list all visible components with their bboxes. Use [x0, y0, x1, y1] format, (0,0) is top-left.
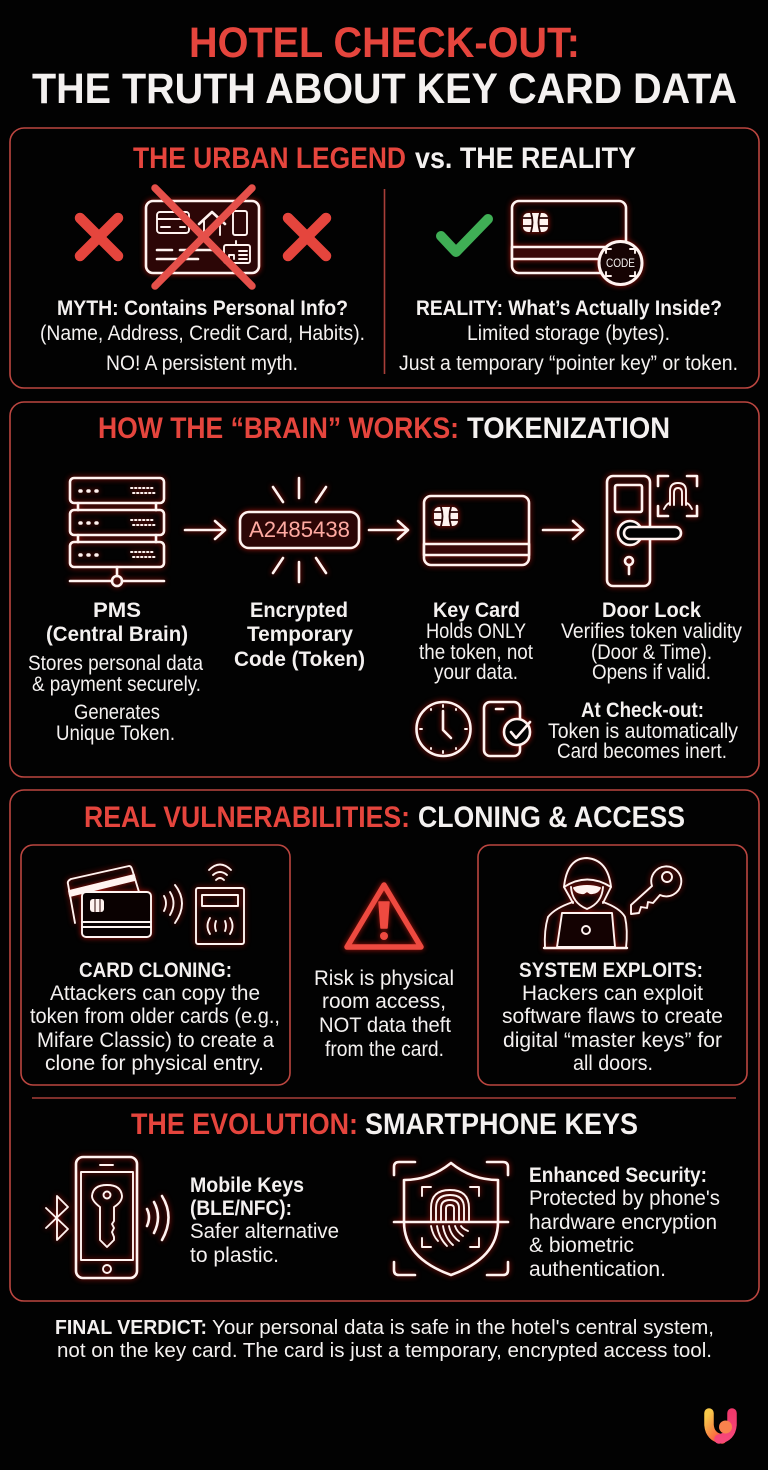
text: mobile keys: [190, 1173, 339, 1267]
text: mobile keys: to plastic.: [190, 1243, 279, 1267]
text: enhanced security: Enhanced Security:: [529, 1163, 707, 1187]
text: key card: [419, 598, 533, 684]
icon: right red cross: [288, 218, 326, 256]
heading: how the brain works: TOKENIZATION: [467, 412, 670, 445]
icon: clock: [416, 702, 470, 756]
text: PMS: Stores personal data: [28, 651, 203, 675]
text: card cloning: clone for physical entry.: [45, 1051, 264, 1075]
text: card cloning: token from older cards (e.g.,: [30, 1004, 280, 1028]
icon: card with code badge: CODE: [606, 256, 635, 270]
text: myth: NO! A persistent myth.: [106, 351, 298, 375]
icon: fingerprint shield: [394, 1162, 508, 1275]
text: mobile keys: Safer alternative: [190, 1219, 339, 1243]
icon: token code: [240, 478, 359, 582]
text: reality: Limited storage (bytes).: [467, 321, 670, 345]
icon: card with personal data: [146, 201, 259, 273]
text: mobile keys: (BLE/NFC):: [190, 1196, 292, 1220]
panel: system exploits: [32, 845, 747, 1281]
text: PMS: & payment securely.: [32, 672, 201, 696]
icon: key card: [424, 496, 529, 565]
heading: real vulnerabilities: [84, 801, 685, 834]
icon: server: [70, 478, 164, 586]
text: myth: [40, 296, 365, 375]
text: card cloning: [30, 958, 280, 1075]
heading: urban legend vs reality: THE URBAN LEGEND: [133, 142, 406, 175]
icon: token code: A2485438: [249, 517, 350, 542]
heading: the evolution: [131, 1108, 638, 1141]
heading: how the brain works: HOW THE “BRAIN” WORKS:: [98, 412, 459, 445]
text: risk statement: from the card.: [325, 1037, 444, 1061]
icon: left red cross: [80, 218, 118, 256]
icon: bluetooth: [46, 1196, 68, 1240]
icon: door lock: [607, 476, 697, 586]
icon: signal waves and reader: [164, 864, 244, 944]
arrow: server to token: [185, 521, 225, 539]
panel: urban legend vs reality: [10, 128, 759, 388]
arrow: card to door: [543, 521, 583, 539]
panel: real vulnerabilities: [10, 790, 759, 1439]
text: card cloning: Mifare Classic) to create a: [37, 1028, 274, 1052]
text: reality: REALITY: What’s Actually Inside?: [416, 296, 722, 320]
text: key card: Holds ONLY: [426, 619, 526, 643]
icon: smartphone key: [76, 1157, 137, 1278]
text: mobile keys: Mobile Keys: [190, 1173, 304, 1197]
text: reality: Just a temporary “pointer key” or token.: [399, 351, 738, 375]
text: PMS: Generates: [74, 700, 160, 724]
text: enhanced security: hardware encryption: [529, 1210, 717, 1234]
text: encrypted temporary code: Encrypted: [250, 598, 348, 622]
text: final verdict: not on the key card. The card is just a temporary, encrypted access tool.: [57, 1340, 712, 1362]
text: system exploits: digital “master keys” for: [503, 1028, 722, 1052]
icon: card with code badge: [512, 201, 642, 284]
text: PMS: PMS: [93, 598, 141, 622]
text: at check-out: Token is automatically: [548, 719, 738, 743]
text: encrypted temporary code: [234, 598, 365, 671]
heading: the evolution: THE EVOLUTION:: [131, 1108, 358, 1141]
text: system exploits: software flaws to create: [502, 1004, 723, 1028]
icon: cloned cards: [68, 866, 151, 937]
text: PMS: (Central Brain): [46, 622, 188, 646]
text: encrypted temporary code: Code (Token): [234, 647, 365, 671]
text: at check-out: Card becomes inert.: [557, 739, 727, 763]
text: card cloning: Attackers can copy the: [50, 981, 260, 1005]
text: PMS: [28, 598, 203, 745]
icon: big red cross over card: [155, 188, 252, 286]
text: risk statement: NOT data theft: [319, 1013, 451, 1037]
text: at check-out: [548, 698, 738, 763]
text: risk statement: [314, 966, 454, 1061]
text: risk statement: Risk is physical: [314, 966, 454, 990]
text: door lock: Door Lock: [602, 598, 701, 622]
text: system exploits: Hackers can exploit: [522, 981, 703, 1005]
text: risk statement: room access,: [322, 989, 446, 1013]
text: enhanced security: Protected by phone's: [529, 1186, 720, 1210]
icon: master key: [631, 866, 681, 914]
icon: green check: [441, 219, 488, 252]
text: key card: Key Card: [433, 598, 520, 622]
text: final verdict: Your personal data is safe in the hotel's central system,: [212, 1317, 714, 1339]
icon: wireless waves: [147, 1196, 168, 1240]
text: enhanced security: [529, 1163, 720, 1281]
text: final verdict: [55, 1317, 714, 1362]
heading: the evolution: SMARTPHONE KEYS: [365, 1108, 638, 1141]
heading: real vulnerabilities: CLONING & ACCESS: [418, 801, 685, 834]
text: door lock: [561, 598, 742, 684]
text: key card: your data.: [434, 660, 518, 684]
text: enhanced security: authentication.: [529, 1257, 666, 1281]
text: system exploits: SYSTEM EXPLOITS:: [519, 958, 703, 982]
text: myth: (Name, Address, Credit Card, Habits).: [40, 321, 365, 345]
text: encrypted temporary code: Temporary: [247, 622, 353, 646]
text: reality: [399, 296, 738, 375]
arrow: token to card: [369, 521, 408, 539]
text: PMS: Unique Token.: [56, 721, 175, 745]
heading: urban legend vs reality: vs. THE REALITY: [415, 142, 636, 175]
icon: hacker with laptop: [544, 858, 627, 948]
text: door lock: (Door & Time).: [591, 640, 712, 664]
text: system exploits: [502, 958, 723, 1075]
title: [32, 19, 737, 113]
heading: urban legend vs reality: [133, 142, 636, 175]
text: key card: the token, not: [419, 640, 533, 664]
text: system exploits: all doors.: [573, 1051, 653, 1075]
panel: tokenization: [10, 402, 759, 777]
icon: phone with check: [484, 702, 530, 756]
text: door lock: Verifies token validity: [561, 619, 742, 643]
text: card cloning: CARD CLONING:: [79, 958, 232, 982]
text: enhanced security: & biometric: [529, 1233, 634, 1257]
title: HOTEL CHECK-OUT:: [189, 19, 580, 67]
text: door lock: Opens if valid.: [592, 660, 711, 684]
text: myth: MYTH: Contains Personal Info?: [57, 296, 348, 320]
text: at check-out: At Check-out:: [581, 698, 704, 722]
icon: warning triangle: [347, 885, 421, 947]
heading: real vulnerabilities: REAL VULNERABILITIES:: [84, 801, 410, 834]
icon: brand logo: [709, 1413, 732, 1439]
text: final verdict: FINAL VERDICT:: [55, 1317, 207, 1339]
panel: card cloning: [21, 845, 290, 1085]
